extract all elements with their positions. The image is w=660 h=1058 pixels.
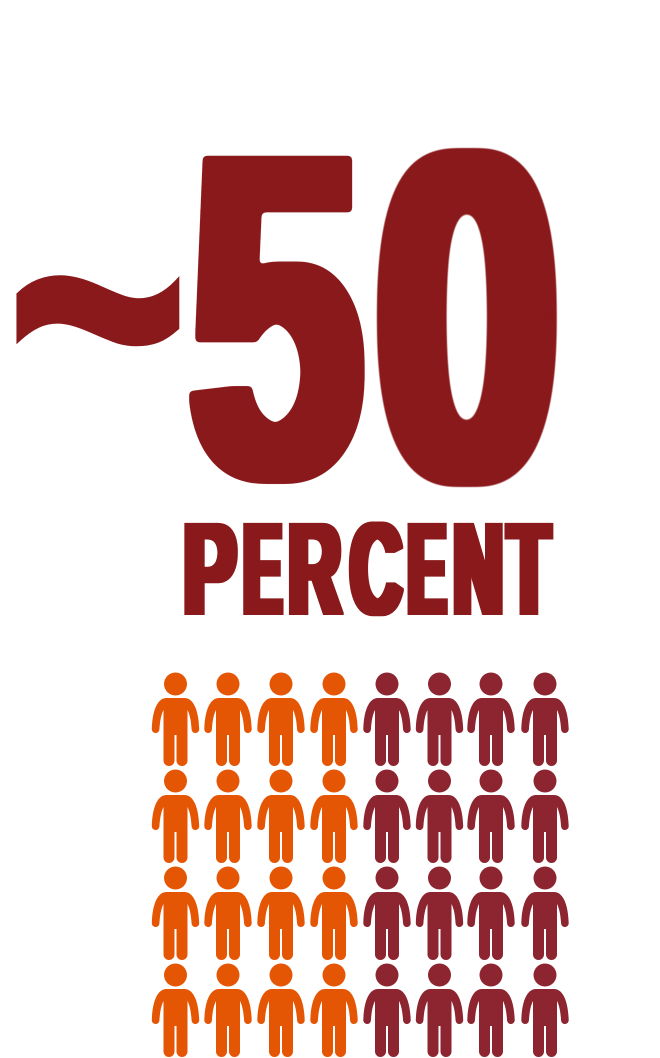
person	[204, 964, 252, 1057]
person	[521, 770, 569, 863]
person	[204, 672, 252, 766]
person	[152, 770, 199, 863]
person	[257, 964, 305, 1057]
person	[204, 770, 252, 863]
digit 5: 5	[189, 62, 363, 571]
person	[310, 964, 358, 1057]
person	[363, 964, 411, 1057]
person	[416, 866, 463, 960]
label: PERCENT: E	[244, 495, 281, 642]
person	[204, 866, 252, 960]
person	[363, 672, 411, 766]
person	[363, 770, 411, 863]
person	[257, 770, 305, 863]
big number: ~50	[7, 57, 558, 578]
person	[467, 866, 515, 960]
person	[467, 964, 515, 1057]
person	[257, 672, 305, 766]
digit 0: 0	[376, 57, 558, 578]
person	[152, 672, 199, 766]
person	[416, 770, 463, 863]
person	[521, 964, 569, 1057]
person	[416, 964, 463, 1057]
tilde: ~	[7, 81, 188, 530]
person	[363, 866, 411, 960]
person	[521, 672, 569, 766]
label: PERCENT: C	[350, 495, 401, 642]
person	[467, 672, 515, 766]
person	[257, 866, 305, 960]
label: PERCENT: N	[454, 495, 503, 642]
person	[310, 866, 358, 960]
label: PERCENT: T	[508, 495, 550, 642]
pictogram: 32 people, half orange half maroon	[152, 672, 569, 1057]
person	[152, 866, 199, 960]
maroon people	[363, 672, 569, 1057]
label: PERCENT: E	[408, 495, 445, 642]
label: PERCENT: P	[184, 495, 236, 642]
person	[310, 672, 358, 766]
person	[152, 964, 199, 1057]
person	[521, 866, 569, 960]
person	[467, 770, 515, 863]
person	[310, 770, 358, 863]
orange people	[152, 672, 358, 1057]
person	[416, 672, 463, 766]
label: PERCENT: R	[289, 495, 341, 642]
label: PERCENT	[184, 495, 550, 642]
